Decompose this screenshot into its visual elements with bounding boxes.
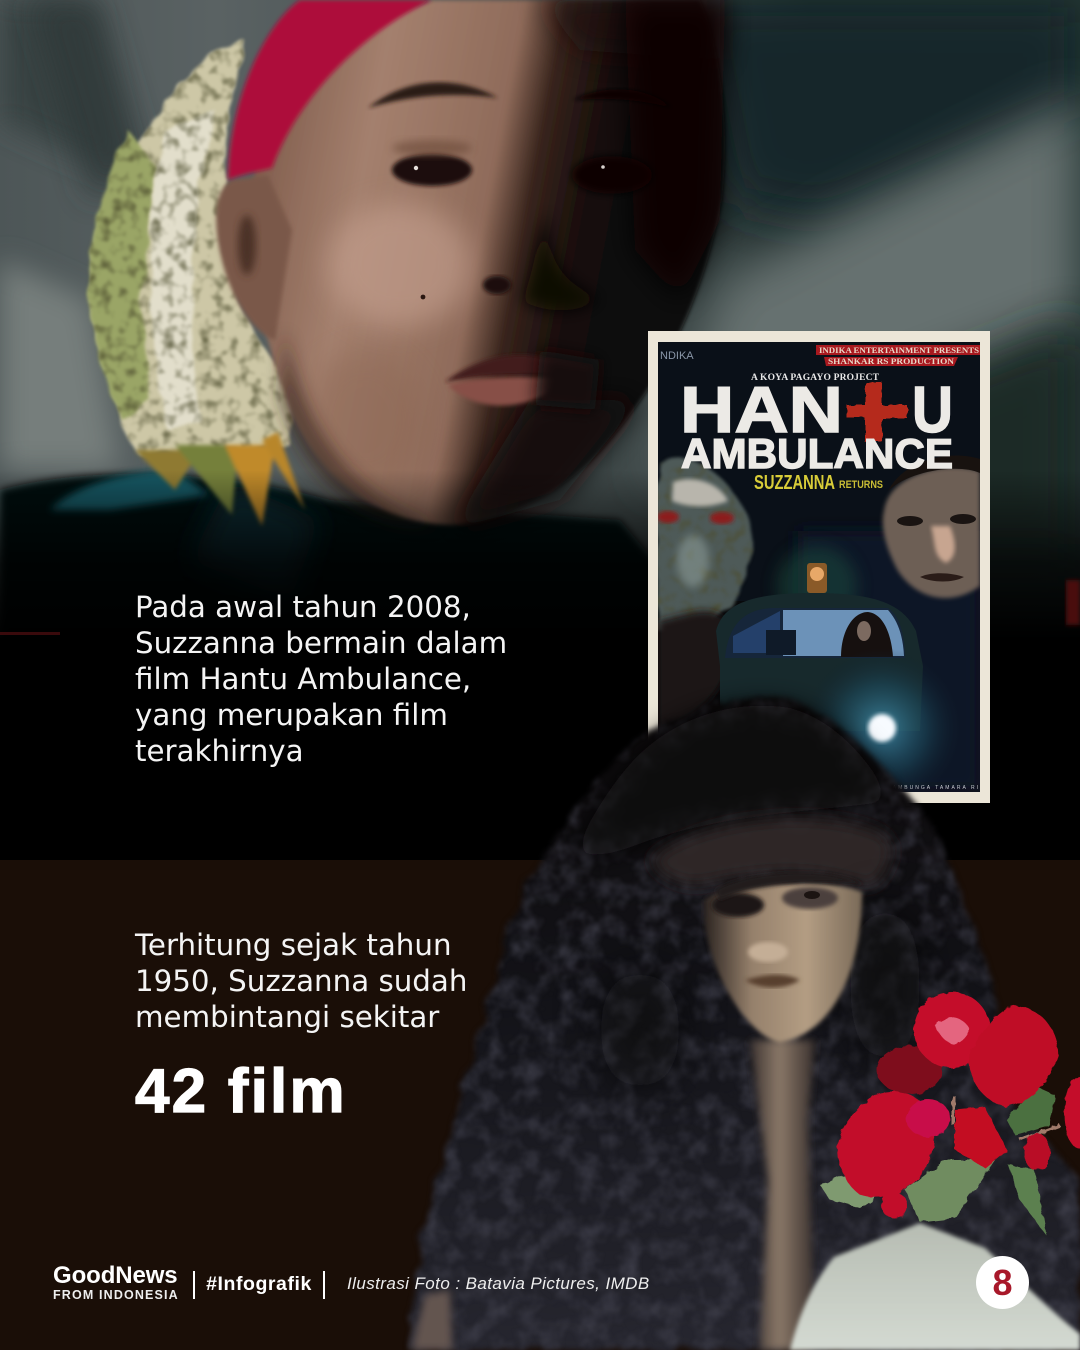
rose bouquet <box>820 992 1080 1235</box>
text: last film <box>135 590 507 768</box>
poster title <box>680 373 953 477</box>
lips <box>445 354 548 384</box>
clothing <box>0 466 648 612</box>
poster title: U <box>912 373 953 446</box>
ghost face <box>704 872 865 1043</box>
poster subtitle: SUZZANNA <box>754 472 835 494</box>
nose <box>518 221 592 314</box>
white cloth <box>790 1223 1080 1350</box>
poster ghost figure <box>657 459 752 731</box>
poster logo: NDIKA <box>660 350 694 362</box>
brows and eyes <box>368 82 498 108</box>
text: last film: terakhirnya <box>135 734 304 768</box>
lower brown band <box>0 860 1080 1350</box>
footer logo <box>53 1262 179 1302</box>
top and jaw shading <box>534 0 602 46</box>
poster title: AMBULANCE <box>681 430 953 477</box>
page number badge: 8 <box>992 1262 1013 1303</box>
headdress tassels <box>135 432 305 526</box>
photo credit: Ilustrasi Foto : Batavia Pictures, IMDB <box>347 1274 650 1293</box>
text: last film: Suzzanna bermain dalam <box>135 626 507 660</box>
poster red banners: INDIKA ENTERTAINMENT PRESENTS <box>819 345 979 355</box>
text: last film: film Hantu Ambulance, <box>135 662 471 696</box>
shadowed locks <box>600 970 680 1090</box>
footer dividers and hashtag <box>193 1271 325 1299</box>
footer logo: FROM INDONESIA <box>53 1288 179 1302</box>
poster woman face <box>883 456 980 598</box>
ear <box>216 175 292 340</box>
footer logo: GoodNews <box>53 1262 178 1289</box>
fringe <box>650 818 891 888</box>
jasmine headdress <box>88 40 293 455</box>
skin patch lower left <box>412 1290 452 1350</box>
text: film count intro <box>134 928 467 1034</box>
text: film count intro: Terhitung sejak tahun <box>135 928 452 962</box>
poster red banners <box>816 345 980 366</box>
text: last film: Pada awal tahun 2008, <box>135 590 471 624</box>
wall folds <box>0 0 1080 560</box>
poster: Hantu Ambulance <box>648 331 990 803</box>
ghost chest <box>750 1040 815 1350</box>
poster red banners: SHANKAR RS PRODUCTION <box>828 356 955 366</box>
poster: Hantu Ambulance: RETURNS <box>839 479 883 491</box>
text: film count intro: 1950, Suzzanna sudah <box>135 964 467 998</box>
hair mass <box>410 698 1080 1350</box>
poster project line: A KOYA PAGAYO PROJECT <box>751 373 880 383</box>
page number badge <box>976 1256 1029 1309</box>
cheek highlight <box>328 203 472 327</box>
text: film count intro: membintangi sekitar <box>135 1000 439 1034</box>
red headband <box>228 0 432 180</box>
text: last film: yang merupakan film <box>135 698 448 732</box>
footer dividers and hashtag: #Infografik <box>206 1273 312 1295</box>
poster title: HAN <box>680 373 843 446</box>
woman's face <box>216 0 725 530</box>
text: 42 film: 42 film <box>135 1057 347 1126</box>
poster credits: TAMBUNGA TAMARA RI <box>888 785 978 791</box>
poster ambulance <box>716 543 945 788</box>
smooth crown <box>575 706 890 855</box>
mole <box>421 295 425 299</box>
